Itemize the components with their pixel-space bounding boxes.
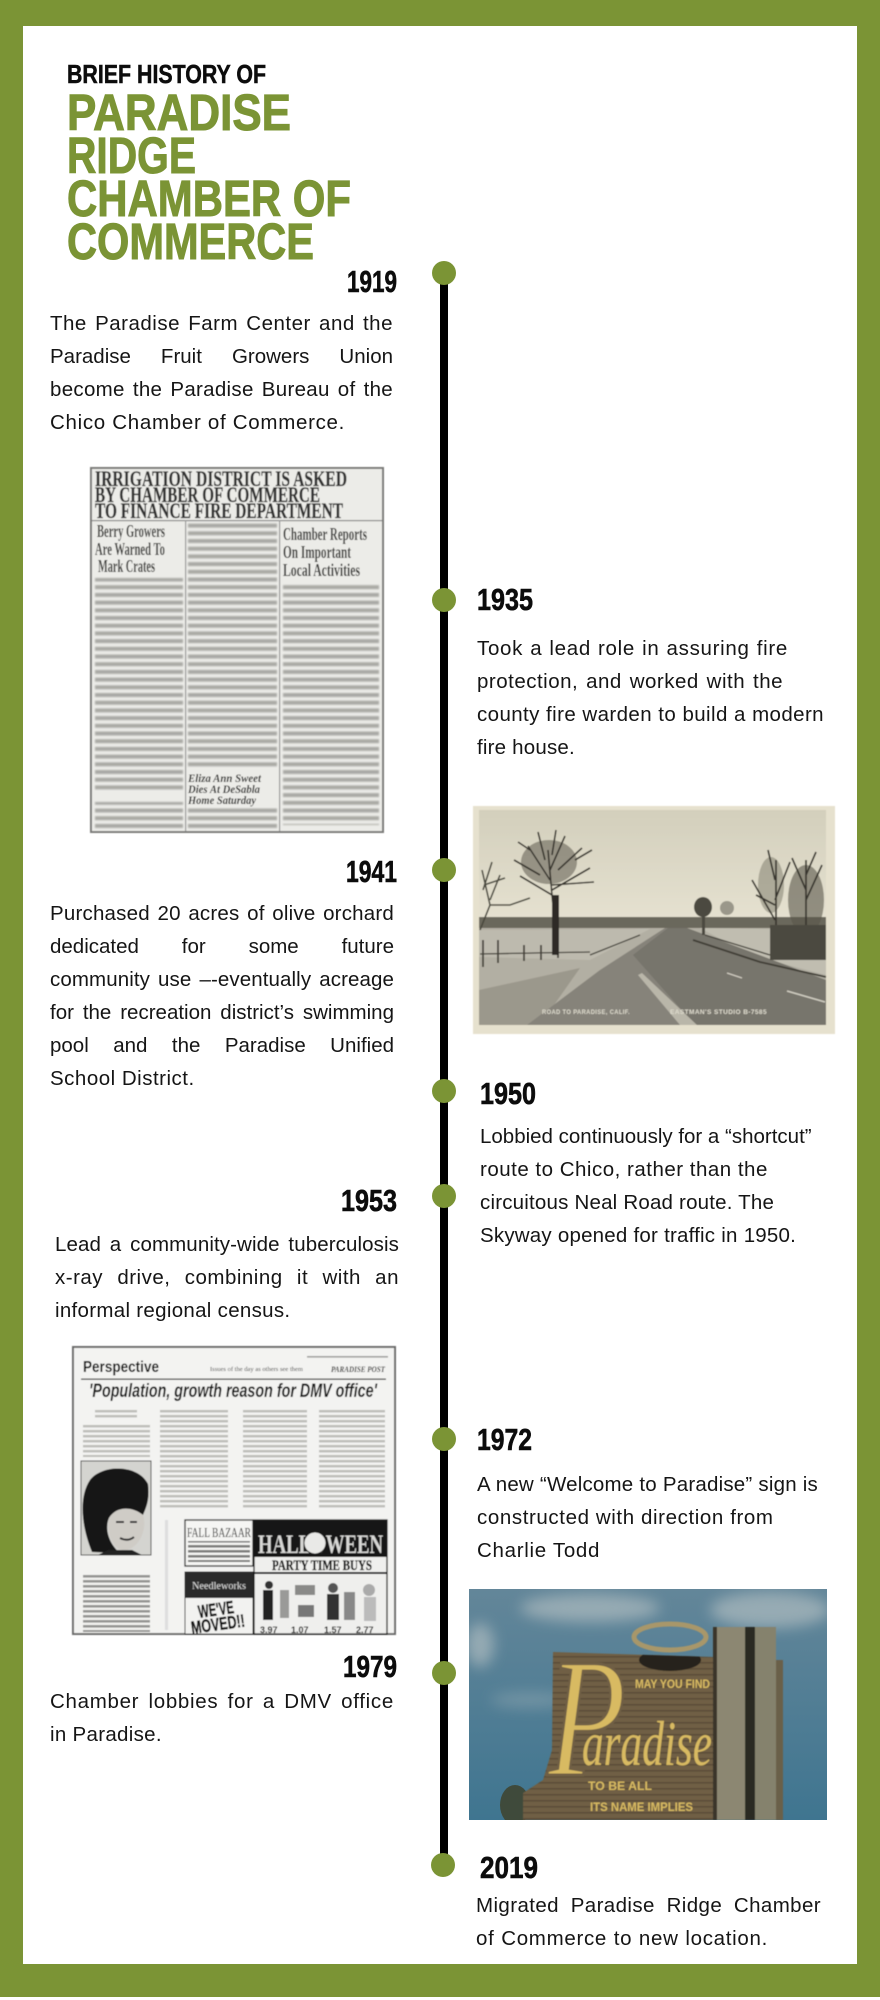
photo caption: ROAD TO PARADISE, CALIF.	[542, 1009, 630, 1016]
sign shrub	[500, 1785, 526, 1820]
title main: organisation name: RIDGE	[67, 127, 196, 184]
road surface	[633, 928, 826, 1025]
back board	[776, 1660, 784, 1820]
text: 1953: x-ray drive, combining it with an	[55, 1266, 399, 1289]
text: 2019: of Commerce to new location.	[476, 1927, 768, 1950]
text: 1919: Paradise Fruit Growers Union	[50, 345, 393, 368]
wooden posts	[713, 1627, 745, 1820]
text: 1950: Lobbied continuously for a “shortcut”	[480, 1125, 812, 1148]
text: 1941	[50, 902, 394, 1090]
text: 1935: Took a lead role in assuring fire	[477, 637, 788, 660]
ad prices: 1.07	[291, 1625, 309, 1635]
newspaper column headlines: Are Warned To	[95, 539, 165, 559]
ad: fall bazaar: FALL BAZAAR	[187, 1526, 251, 1541]
text: 1941: for the recreation district’s swimming	[50, 1001, 394, 1024]
newspaper column headlines: Local Activities	[283, 560, 360, 580]
years: 1941	[346, 854, 397, 889]
text: 1919	[50, 312, 393, 434]
text: 1935: county fire warden to build a modern	[477, 703, 824, 726]
text: 1979: Chamber lobbies for a DMV office	[50, 1690, 394, 1713]
years: 1935	[477, 582, 533, 617]
text: 1953	[55, 1233, 399, 1322]
photo caption: EASTMAN'S STUDIO B-7585	[670, 1009, 767, 1016]
image: irrigation district newspaper clipping	[91, 466, 383, 832]
sign lettering: ITS NAME IMPLIES	[590, 1800, 693, 1814]
masthead: Issues of the day as others see them	[210, 1366, 303, 1373]
newspaper column headlines: On Important	[283, 542, 351, 562]
road shoulder	[527, 928, 693, 1025]
text: 1935: fire house.	[477, 736, 575, 759]
text: 1941: pool and the Paradise Unified	[50, 1034, 394, 1057]
text: 1950: circuitous Neal Road route. The	[480, 1191, 774, 1214]
ad: needleworks moved: WE'VE	[197, 1597, 235, 1622]
newspaper column text	[95, 522, 379, 830]
sign script: Paradise: aradise	[582, 1708, 712, 1779]
image: perspective newspaper page on DMV office	[73, 1347, 395, 1638]
ad: needleworks moved	[185, 1572, 253, 1638]
text: 1972	[477, 1473, 818, 1562]
newspaper column headlines: Mark Crates	[98, 556, 155, 576]
page columns	[83, 1409, 385, 1510]
timeline line	[440, 273, 448, 1865]
sign lettering	[588, 1677, 710, 1814]
ad: fall bazaar	[185, 1520, 253, 1566]
sign board	[523, 1652, 713, 1820]
title line: brief history of: BRIEF HISTORY OF	[67, 59, 266, 89]
ad: halloween party time buys: PARTY TIME BUYS	[272, 1558, 372, 1574]
ad prices	[260, 1625, 374, 1635]
years	[341, 264, 538, 1885]
text: 1979	[50, 1690, 394, 1746]
text: 1935: protection, and worked with the	[477, 670, 783, 693]
photo caption	[542, 1009, 767, 1016]
years: 1953	[341, 1183, 397, 1218]
sign script: Paradise: P	[547, 1624, 626, 1812]
ad: halloween party time buys	[254, 1520, 387, 1635]
ring	[634, 1624, 706, 1650]
ad: halloween party time buys: HALLOWEEN	[258, 1530, 383, 1559]
portrait photo	[81, 1461, 151, 1555]
text: 1972: constructed with direction from	[477, 1506, 774, 1529]
text: 1935	[477, 637, 824, 759]
years: 1950	[480, 1076, 536, 1111]
masthead	[81, 1356, 388, 1380]
ad: needleworks moved: MOVED!!	[190, 1611, 246, 1638]
timeline	[431, 261, 456, 1877]
timeline dots	[431, 261, 456, 1877]
newspaper headline: IRRIGATION DISTRICT IS ASKED	[95, 466, 347, 491]
sign script: Paradise	[546, 1662, 712, 1774]
costume figures	[263, 1581, 376, 1621]
tree: bare left tree	[480, 862, 530, 930]
sign lettering: MAY YOU FIND	[635, 1677, 710, 1691]
trees: right trees	[752, 850, 826, 960]
years: 1919	[347, 264, 397, 299]
ad: needleworks moved: Needleworks	[192, 1580, 246, 1592]
sign lettering: TO BE ALL	[588, 1779, 652, 1793]
text: 1979: in Paradise.	[50, 1723, 162, 1746]
image: Welcome to Paradise sign photograph	[466, 1589, 830, 1825]
ad prices: 2.77	[356, 1625, 374, 1635]
title main: organisation name: COMMERCE	[67, 213, 314, 270]
text: 1950	[480, 1125, 812, 1247]
text: 1919: Chico Chamber of Commerce.	[50, 411, 345, 434]
newspaper column headlines: Eliza Ann Sweet	[187, 771, 262, 785]
text: 2019: Migrated Paradise Ridge Chamber	[476, 1894, 821, 1917]
text: 1919: The Paradise Farm Center and the	[50, 312, 393, 335]
text: 1941: dedicated for some future	[50, 935, 394, 958]
years: 2019	[480, 1850, 538, 1885]
text: 1950: Skyway opened for traffic in 1950.	[480, 1224, 796, 1247]
newspaper column headlines: Dies At DeSabla	[187, 782, 260, 796]
text: 1941: Purchased 20 acres of olive orchard	[50, 902, 394, 925]
distant treeline	[479, 917, 826, 931]
newspaper column headlines: Home Saturday	[187, 793, 257, 807]
trees: small distant trees	[694, 897, 734, 935]
title	[67, 59, 351, 270]
text: 1972: Charlie Todd	[477, 1539, 600, 1562]
page headline: 'Population, growth reason for DMV office'	[89, 1381, 378, 1402]
clouds	[466, 1592, 830, 1708]
newspaper headline: TO FINANCE FIRE DEPARTMENT	[95, 498, 343, 523]
years: 1972	[477, 1422, 532, 1457]
newspaper column headlines: Berry Growers	[97, 521, 165, 541]
title main: organisation name: PARADISE	[67, 84, 291, 141]
fence posts	[480, 935, 770, 967]
title main: organisation name	[67, 84, 351, 270]
fields	[479, 928, 826, 1025]
ad prices: 1.57	[324, 1625, 342, 1635]
tree: large left tree	[514, 830, 594, 955]
masthead: PARADISE POST	[331, 1365, 386, 1374]
text: 1953: informal regional census.	[55, 1299, 290, 1322]
masthead: Perspective	[83, 1359, 159, 1376]
newspaper headline	[95, 466, 347, 523]
title main: organisation name: CHAMBER OF	[67, 170, 351, 227]
ad prices: 3.97	[260, 1625, 278, 1635]
text: 1941: community use –-eventually acreage	[50, 968, 394, 991]
text: 1950: route to Chico, rather than the	[480, 1158, 768, 1181]
newspaper column headlines	[95, 521, 367, 807]
image: road to Paradise photograph	[473, 806, 835, 1034]
newspaper column headlines: Chamber Reports	[283, 524, 367, 544]
text: 2019	[476, 1894, 821, 1950]
newspaper headline: BY CHAMBER OF COMMERCE	[95, 482, 320, 507]
text: 1941: School District.	[50, 1067, 195, 1090]
years: 1979	[343, 1649, 397, 1684]
text: 1953: Lead a community-wide tuberculosis	[55, 1233, 399, 1256]
ring shadow	[638, 1654, 702, 1672]
text: 1972: A new “Welcome to Paradise” sign is	[477, 1473, 818, 1496]
text: 1919: become the Paradise Bureau of the	[50, 378, 393, 401]
